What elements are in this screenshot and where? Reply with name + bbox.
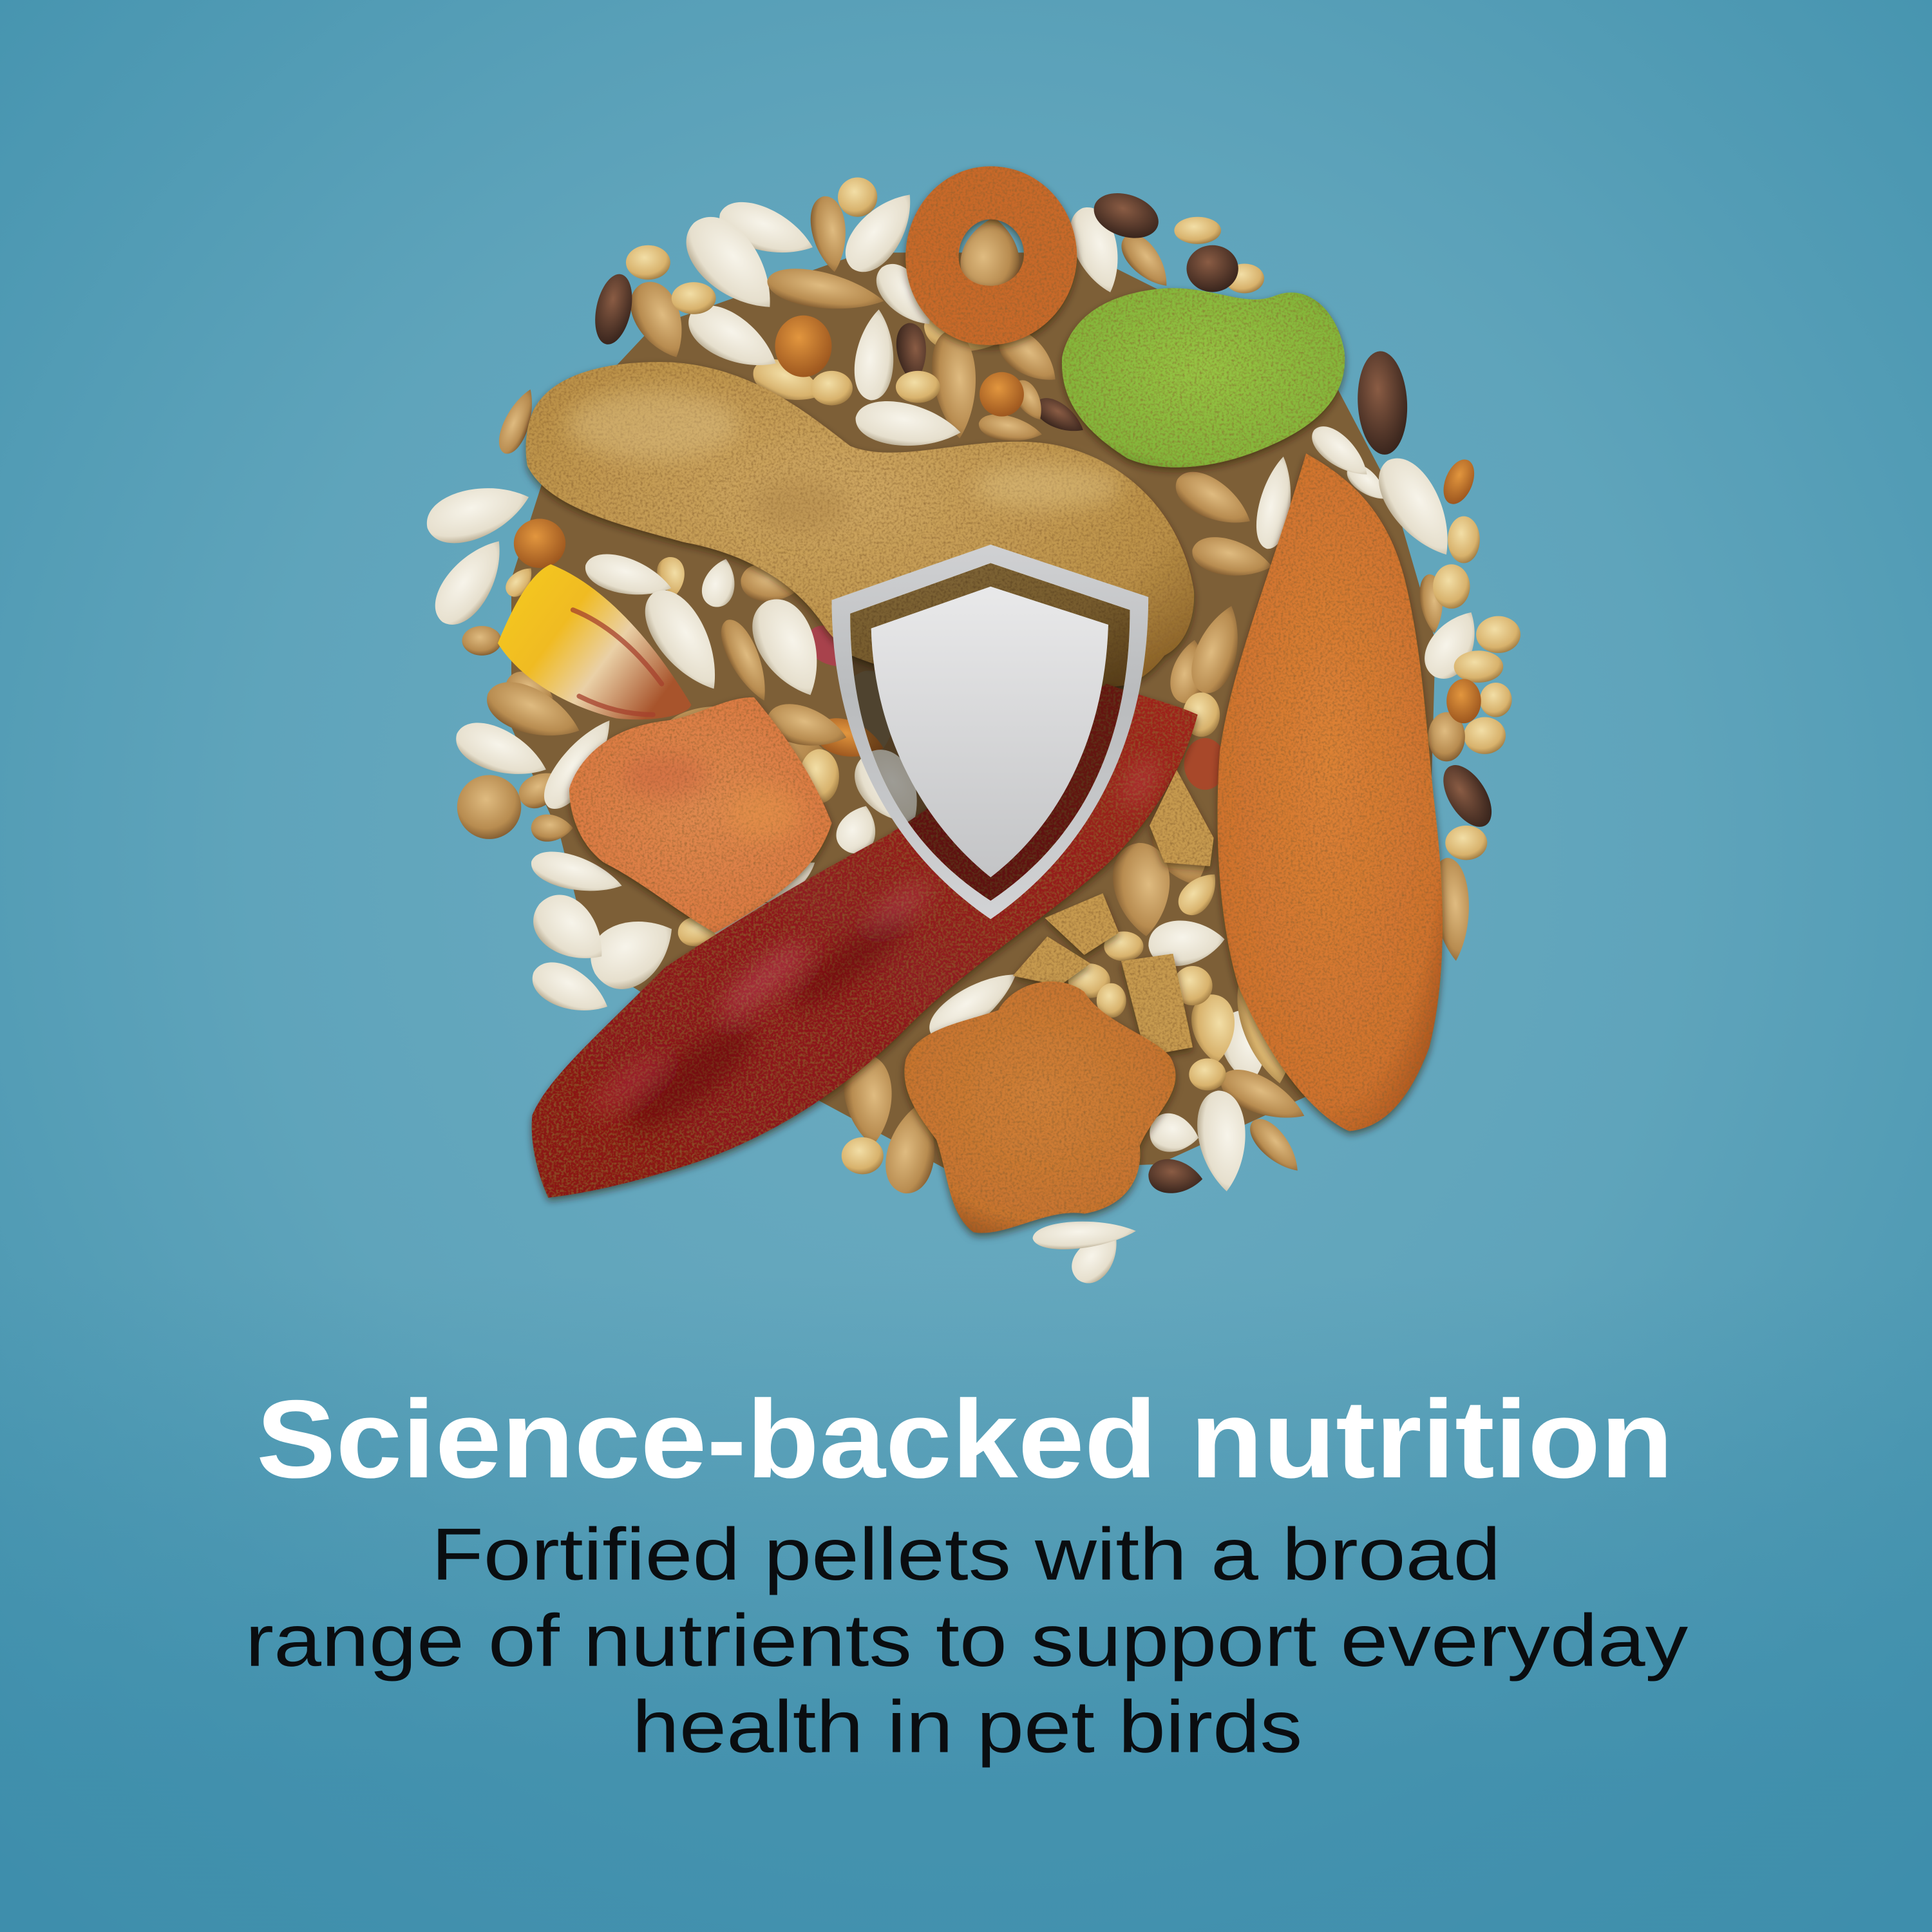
corn stripe <box>573 610 661 715</box>
seed pile backdrop <box>511 252 1435 1171</box>
papaya texture <box>622 754 801 840</box>
shield outer ring <box>831 545 1148 919</box>
description text: health in pet birds <box>632 1686 1302 1768</box>
corn kernel <box>498 564 691 719</box>
peanut shell <box>526 362 1194 690</box>
green pellet <box>1062 288 1345 468</box>
shield inner plate <box>871 587 1108 877</box>
description text: Fortified pellets with a broad <box>431 1513 1501 1596</box>
description text <box>245 1513 1689 1768</box>
papaya chunk <box>569 697 831 933</box>
red chili pepper <box>532 684 1198 1198</box>
flower-shaped pellet <box>904 981 1175 1233</box>
long orange pellet <box>1218 453 1443 1131</box>
ring seed <box>958 214 1023 293</box>
peanut highlights <box>567 391 1121 533</box>
chili highlights <box>582 753 1164 1147</box>
orange ring pellet <box>905 166 1077 345</box>
description text: range of nutrients to support everyday <box>245 1600 1689 1682</box>
mixed seeds <box>420 178 1520 1291</box>
shield icon <box>831 545 1148 919</box>
seed and pellet pile illustration <box>420 166 1520 1291</box>
heading: Science-backed nutrition <box>256 1378 1673 1501</box>
small pellets <box>1013 770 1214 1056</box>
shield dark see-through band <box>850 563 1130 901</box>
